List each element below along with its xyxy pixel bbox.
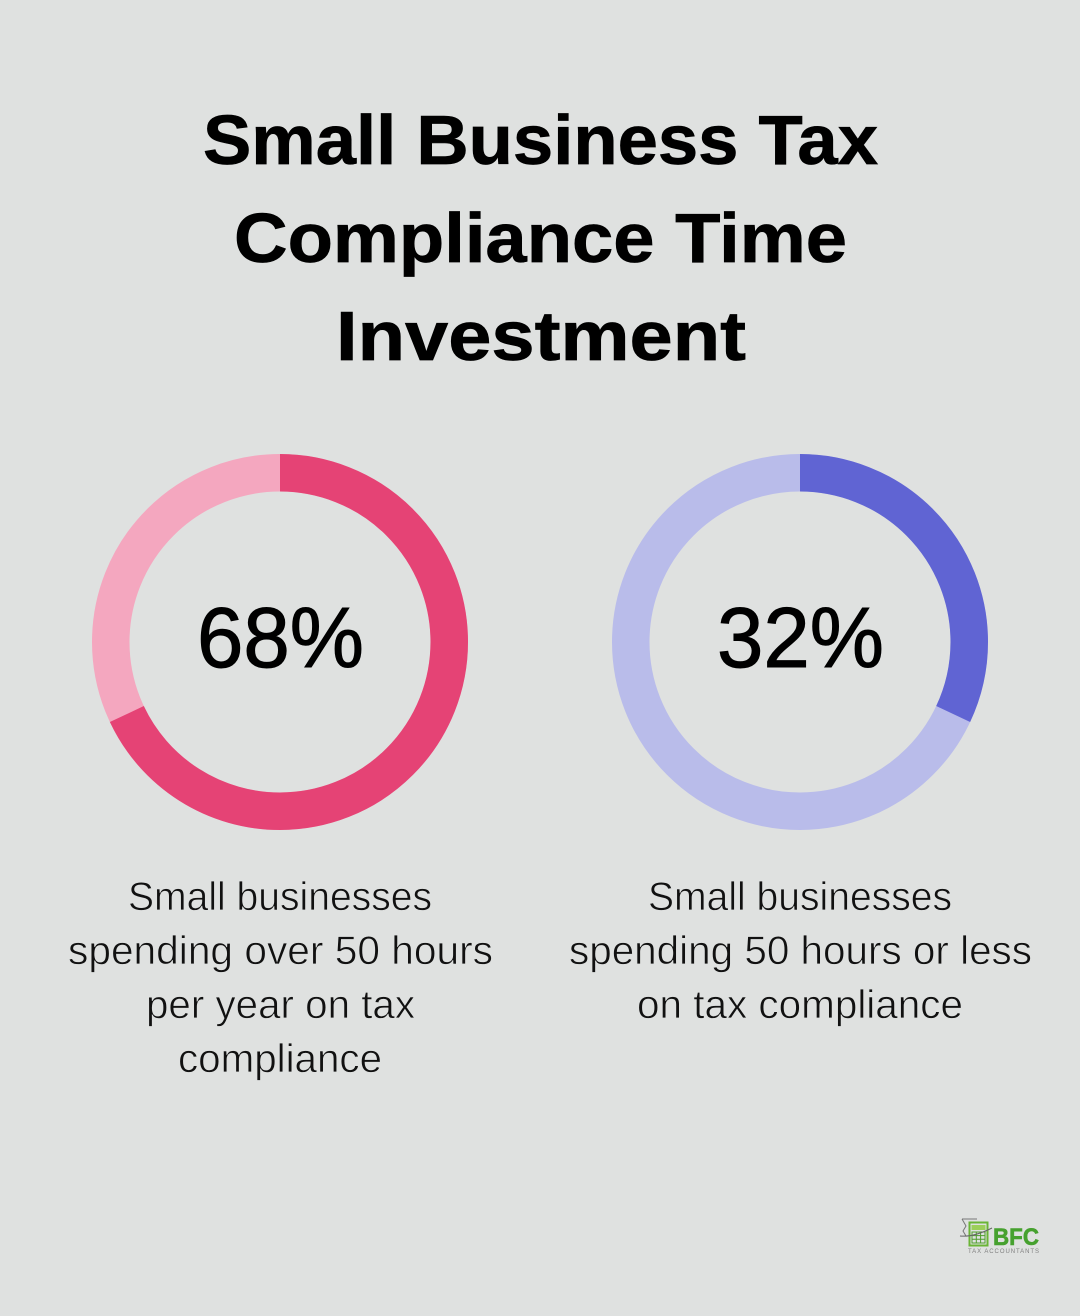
title (203, 101, 878, 375)
description: 50 hours or less (569, 875, 1032, 1027)
description: over 50 hours: Small businesses (128, 875, 432, 919)
title: Investment (336, 297, 746, 375)
description: over 50 hours (68, 875, 493, 1081)
value: 32%: 32% (717, 591, 884, 686)
description: 50 hours or less: Small businesses (648, 875, 952, 919)
logo: BFC Tax Accountants (960, 1219, 1039, 1255)
donut chart: 32 percent (631, 473, 969, 811)
description: 50 hours or less: spending 50 hours or less (569, 929, 1032, 973)
panel: 32 percent (569, 473, 1032, 1027)
donut chart: 68 percent (111, 473, 449, 811)
logo wordmark: BFC (993, 1224, 1039, 1251)
panel: 68 percent (68, 473, 493, 1081)
icon: calculator (960, 1219, 992, 1246)
logo tagline: TAX ACCOUNTANTS (968, 1249, 1039, 1255)
title: Compliance Time (234, 199, 847, 277)
title: Small Business Tax (203, 101, 878, 179)
description: over 50 hours: compliance (178, 1037, 382, 1081)
description: over 50 hours: per year on tax (146, 983, 415, 1027)
description: 50 hours or less: on tax compliance (637, 983, 963, 1027)
description: over 50 hours: spending over 50 hours (68, 929, 493, 973)
value: 68%: 68% (197, 591, 364, 686)
